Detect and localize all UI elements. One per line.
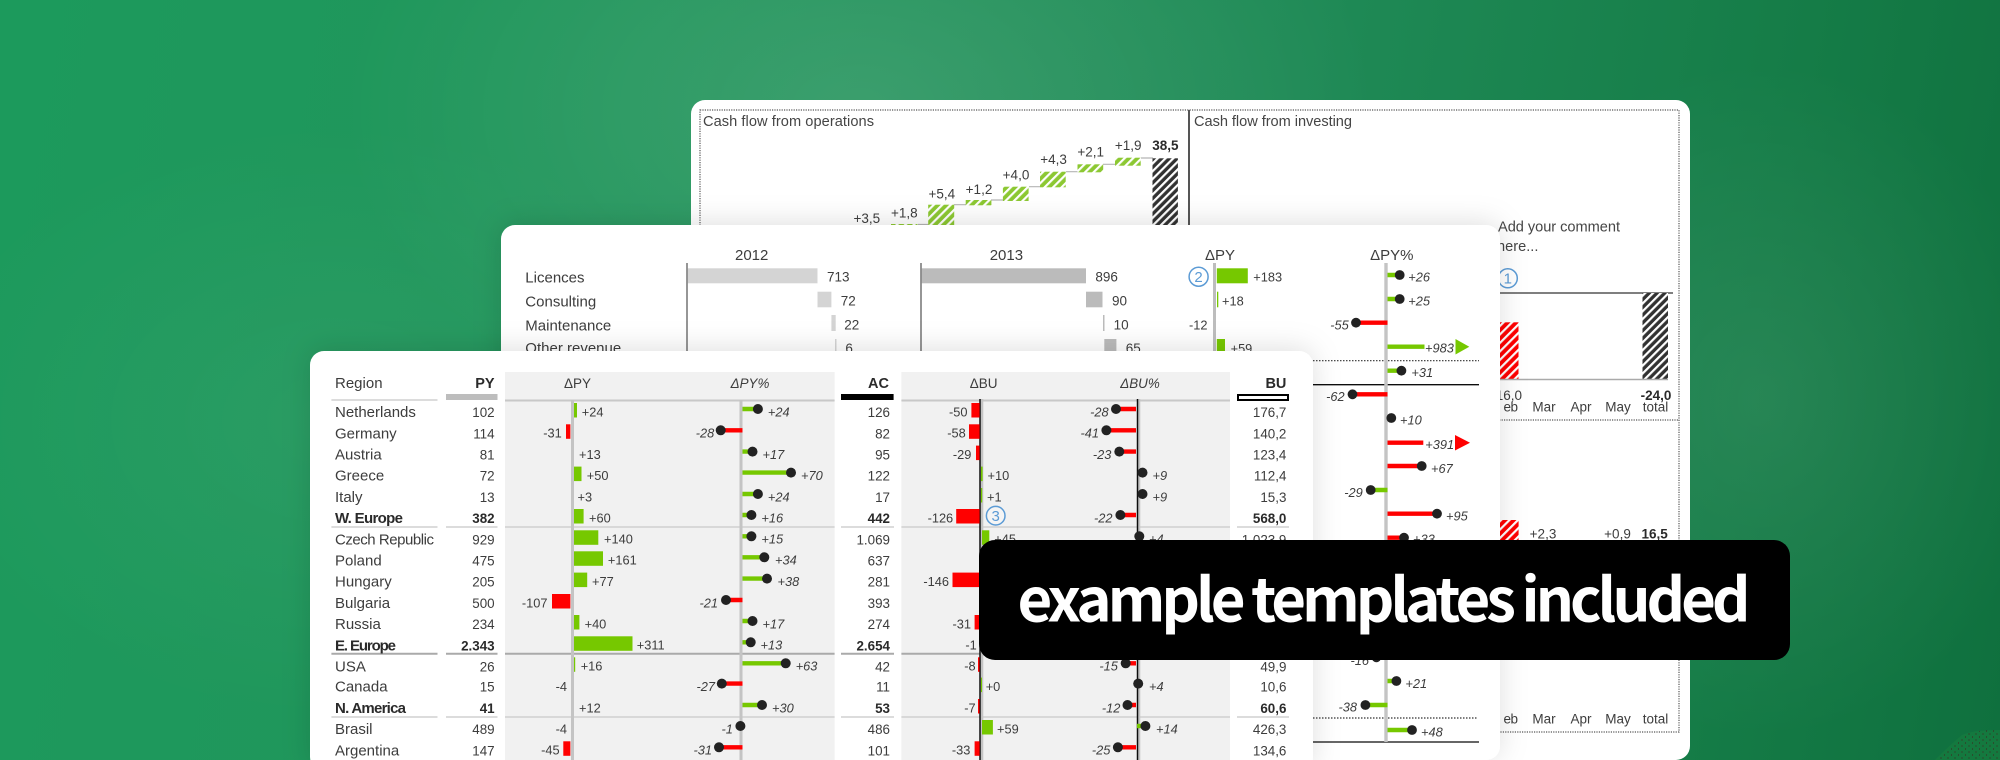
delta BU percent lollipop column: -22 xyxy=(1094,510,1112,525)
AC column: 126 xyxy=(868,405,890,420)
PY column: 475 xyxy=(472,553,495,568)
financing bar chart: Apr xyxy=(1570,711,1592,726)
PY column xyxy=(446,376,498,758)
callout marker 2 xyxy=(1189,267,1208,286)
delta BU percent lollipop column: +4 xyxy=(1149,532,1164,547)
panel: regional table (front card) xyxy=(310,351,1313,760)
banner text: example templates included xyxy=(1018,553,1750,640)
AC column: 486 xyxy=(868,722,890,737)
delta PY bar column xyxy=(522,376,665,760)
waterfall chart: +1,9 xyxy=(1115,138,1142,153)
BU column: 10,6 xyxy=(1260,680,1286,695)
delta PY percent lollipop column: -21 xyxy=(700,595,718,610)
delta PY percent lollipop chart: -55 xyxy=(1330,318,1350,333)
panel: cash flow dashboard (back card) xyxy=(691,100,1690,760)
waterfall chart: +4,3 xyxy=(1040,152,1067,167)
AC column: 1.069 xyxy=(856,532,890,547)
delta PY percent lollipop column: +63 xyxy=(796,659,817,674)
delta BU bar column: +0 xyxy=(986,679,1000,694)
delta PY bar chart: ΔPY xyxy=(1205,247,1235,264)
delta PY percent lollipop chart: +95 xyxy=(1446,508,1469,524)
AC column: 442 xyxy=(868,511,890,526)
delta PY percent lollipop chart: +31 xyxy=(1411,365,1433,380)
delta PY bar column: -107 xyxy=(522,595,548,610)
delta PY percent lollipop column: +17 xyxy=(762,616,785,631)
investing bar chart: Feb xyxy=(1490,400,1518,415)
bar chart 2012: 72 xyxy=(841,294,856,309)
delta PY bar column: -4 xyxy=(556,679,567,694)
delta BU percent lollipop column: +9 xyxy=(1152,489,1167,504)
delta PY bar chart xyxy=(1189,247,1282,356)
delta BU bar column: -1 xyxy=(965,638,977,653)
AC column: 17 xyxy=(875,490,890,505)
heading: cash flow from investing: Cash flow from investing xyxy=(1194,114,1352,130)
delta BU percent lollipop column: -28 xyxy=(1090,404,1109,419)
delta PY percent lollipop column: +34 xyxy=(775,553,797,568)
delta BU bar column: -146 xyxy=(923,574,949,589)
delta PY percent lollipop chart: -16 xyxy=(1350,653,1370,668)
delta PY percent lollipop chart: ΔPY% xyxy=(1370,247,1413,264)
region column: Hungary xyxy=(335,574,392,591)
AC column: 393 xyxy=(868,596,890,611)
AC column: 637 xyxy=(868,553,890,568)
AC column: 53 xyxy=(875,701,890,716)
delta BU percent lollipop column xyxy=(1080,376,1178,760)
PY column: 147 xyxy=(472,743,495,758)
PY column: 81 xyxy=(480,448,495,463)
region column: Austria xyxy=(335,447,382,464)
delta PY bar column: +16 xyxy=(581,659,602,674)
delta PY percent lollipop column: -28 xyxy=(696,426,715,441)
delta BU percent lollipop column: +9 xyxy=(1152,468,1167,483)
delta BU bar column xyxy=(923,376,1019,760)
bar chart 2013 xyxy=(921,247,1141,356)
BU column: BU xyxy=(1265,376,1286,392)
BU column: 1.023,9 xyxy=(1242,532,1286,547)
delta PY percent lollipop column: +70 xyxy=(801,468,824,483)
region column: Poland xyxy=(335,552,382,569)
delta PY bar chart: +59 xyxy=(1231,341,1252,356)
bar chart 2012: 713 xyxy=(827,270,850,285)
AC column: 11 xyxy=(876,680,890,695)
delta BU percent lollipop column: -25 xyxy=(1092,743,1111,758)
AC column: 95 xyxy=(875,448,890,463)
BU column: 426,3 xyxy=(1253,722,1286,737)
grey column backgrounds xyxy=(505,372,1230,760)
delta PY bar column: ΔPY xyxy=(564,376,591,391)
waterfall chart: 38,5 xyxy=(1152,138,1179,153)
delta BU bar column: -33 xyxy=(952,743,970,758)
callout marker 1: 1 xyxy=(1504,270,1512,288)
PY column: 929 xyxy=(472,532,495,547)
PY column: PY xyxy=(475,376,495,392)
region column: E. Europe xyxy=(335,637,396,654)
delta BU percent lollipop column: -15 xyxy=(1099,659,1119,674)
AC column: 101 xyxy=(868,743,890,758)
delta PY percent lollipop column: ΔPY% xyxy=(730,376,769,391)
delta PY percent lollipop chart: +25 xyxy=(1408,294,1431,309)
delta BU percent lollipop column: +4 xyxy=(1149,679,1164,694)
BU column: 15,3 xyxy=(1260,490,1286,505)
delta PY percent lollipop chart: +33 xyxy=(1413,532,1435,546)
region column: N. America xyxy=(335,700,407,717)
delta PY percent lollipop column xyxy=(694,376,824,760)
delta PY percent lollipop chart: +21 xyxy=(1405,676,1427,691)
investing bar chart: Apr xyxy=(1570,400,1592,415)
region column: Italy xyxy=(335,489,363,506)
callout marker 2: 2 xyxy=(1194,269,1203,286)
callout banner xyxy=(979,540,1790,660)
delta PY percent lollipop chart: +983 xyxy=(1425,341,1454,356)
row labels: Other revenue xyxy=(525,340,621,357)
region column: Canada xyxy=(335,679,388,696)
delta PY bar column: -45 xyxy=(541,743,560,758)
waterfall chart: +1,8 xyxy=(891,205,918,220)
PY column: 234 xyxy=(472,617,495,632)
delta BU bar column: ΔBU xyxy=(970,376,997,391)
delta PY bar column: +311 xyxy=(637,638,665,653)
delta PY percent lollipop column: +24 xyxy=(768,489,790,504)
delta BU bar column: -29 xyxy=(953,447,971,462)
decorative dotted corner xyxy=(1935,730,2000,760)
region column: Germany xyxy=(335,425,397,442)
delta BU percent lollipop column: +14 xyxy=(1156,721,1178,736)
bar chart 2012 xyxy=(687,247,859,356)
delta PY percent lollipop chart: +48 xyxy=(1421,724,1444,740)
delta BU bar column: -7 xyxy=(964,700,976,715)
waterfall chart: +2,1 xyxy=(1077,145,1104,160)
investing bar chart xyxy=(1490,293,1673,415)
delta PY percent lollipop chart: +391 xyxy=(1425,437,1454,452)
region column: Greece xyxy=(335,468,384,485)
AC column: 122 xyxy=(868,469,890,484)
waterfall chart: +1,2 xyxy=(966,182,992,197)
delta BU bar column: +45 xyxy=(994,532,1016,547)
financing bar chart: May xyxy=(1605,711,1631,726)
bar chart 2012: 2012 xyxy=(735,247,768,264)
delta PY bar column: +161 xyxy=(608,553,637,568)
investing bar chart: May xyxy=(1605,400,1631,415)
financing bar chart: Feb xyxy=(1490,711,1518,726)
delta PY percent lollipop column: +38 xyxy=(778,574,800,589)
dotted frame xyxy=(700,110,1679,732)
financing bar chart: 16,5 xyxy=(1641,526,1668,541)
region column: Czech Republic xyxy=(335,531,434,548)
delta PY bar column: +3 xyxy=(578,489,592,504)
delta BU bar column: +10 xyxy=(988,468,1009,483)
region column: Region xyxy=(335,375,383,392)
region column: Argentina xyxy=(335,742,400,759)
delta PY percent lollipop column: -31 xyxy=(694,743,712,758)
delta BU bar column: -8 xyxy=(964,659,976,674)
delta PY percent lollipop column: -1 xyxy=(722,721,733,736)
delta PY bar chart: +18 xyxy=(1222,294,1244,309)
AC column: 274 xyxy=(868,617,891,632)
financing bar chart xyxy=(1490,520,1668,726)
bar chart 2013: 65 xyxy=(1126,341,1141,356)
table separators xyxy=(331,400,1289,717)
BU column xyxy=(1238,376,1288,758)
row labels: Maintenance xyxy=(525,318,611,335)
BU column: 123,4 xyxy=(1253,448,1287,463)
AC column xyxy=(841,376,894,758)
BU column: 176,7 xyxy=(1253,405,1286,420)
BU column: 568,0 xyxy=(1253,511,1286,526)
delta PY percent lollipop chart: +67 xyxy=(1431,461,1454,476)
financing bar chart: Mar xyxy=(1532,711,1556,726)
PY column: 72 xyxy=(480,469,495,484)
AC column: 42 xyxy=(875,659,890,674)
AC column: 2.654 xyxy=(856,638,891,653)
PY column: 114 xyxy=(473,426,495,441)
comment text: here... xyxy=(1497,239,1538,255)
waterfall chart: +4,0 xyxy=(1003,167,1029,182)
bar chart 2013: 10 xyxy=(1114,318,1129,333)
bar chart 2013: 896 xyxy=(1095,270,1118,285)
delta PY percent lollipop column: -27 xyxy=(696,679,716,694)
delta PY bar column: +50 xyxy=(587,468,609,483)
delta PY bar chart: +183 xyxy=(1253,270,1282,285)
delta PY percent lollipop chart xyxy=(1313,247,1479,742)
financing bar chart: +2,3 xyxy=(1530,526,1556,541)
delta BU bar column: +59 xyxy=(997,721,1019,736)
comment text: Add your comment xyxy=(1498,220,1620,236)
delta PY percent lollipop column: +13 xyxy=(760,638,782,653)
region column: Bulgaria xyxy=(335,595,391,612)
waterfall chart: +3,5 xyxy=(853,211,880,226)
PY column: 26 xyxy=(480,659,495,674)
region column: Russia xyxy=(335,616,382,633)
delta PY percent lollipop chart: +10 xyxy=(1400,413,1423,428)
callout marker 1 xyxy=(1498,269,1517,288)
financing bar chart: +0,9 xyxy=(1604,526,1631,541)
row labels: Licences xyxy=(525,270,585,287)
region column: W. Europe xyxy=(335,510,403,527)
delta PY bar column: +140 xyxy=(604,532,633,547)
delta BU bar column: -126 xyxy=(928,510,953,525)
investing bar chart: Mar xyxy=(1532,400,1556,415)
delta PY bar column: +40 xyxy=(585,616,606,631)
delta PY bar column: +24 xyxy=(582,404,604,419)
delta PY bar chart: -12 xyxy=(1189,318,1208,333)
delta BU percent lollipop column: -12 xyxy=(1102,700,1120,715)
BU column: 134,6 xyxy=(1253,743,1286,758)
bar chart 2013: 90 xyxy=(1112,294,1127,309)
delta PY bar column: +60 xyxy=(589,510,611,525)
delta BU bar column: +1 xyxy=(987,489,1002,504)
region column: Netherlands xyxy=(335,404,416,421)
BU column: 112,4 xyxy=(1254,469,1287,484)
delta PY percent lollipop chart: -29 xyxy=(1344,485,1363,500)
region column xyxy=(335,375,434,759)
PY column: 102 xyxy=(472,405,495,420)
PY column: 15 xyxy=(480,680,495,695)
PY column: 41 xyxy=(480,701,495,716)
investing bar chart: -24,0 xyxy=(1641,388,1671,403)
delta PY percent lollipop column: +24 xyxy=(768,404,790,419)
delta PY bar column: -31 xyxy=(543,426,562,441)
delta PY bar column: -4 xyxy=(556,721,567,736)
delta BU percent lollipop column: ΔBU% xyxy=(1119,376,1160,391)
waterfall chart: +5,4 xyxy=(928,186,956,201)
delta PY percent lollipop chart: -38 xyxy=(1338,700,1358,715)
waterfall chart xyxy=(853,138,1179,238)
PY column: 489 xyxy=(472,722,495,737)
AC column: AC xyxy=(868,376,890,392)
PY column: 2.343 xyxy=(461,638,495,653)
callout marker 3: 3 xyxy=(992,508,1000,525)
bar chart 2013: 2013 xyxy=(990,247,1023,264)
delta PY percent lollipop column: +16 xyxy=(761,510,784,525)
delta PY percent lollipop column: +17 xyxy=(762,447,785,462)
delta BU bar column: -50 xyxy=(949,404,968,419)
region column: Brasil xyxy=(335,721,373,738)
callout marker 3 xyxy=(986,506,1005,525)
comment text xyxy=(1497,220,1620,255)
financing bar chart: total xyxy=(1643,711,1668,726)
panel: revenue comparison (middle card) xyxy=(501,225,1500,760)
BU column: 60,6 xyxy=(1260,701,1286,716)
delta PY bar column: +13 xyxy=(579,447,601,462)
AC column: 82 xyxy=(875,426,890,441)
heading: cash flow from operations: Cash flow from operations xyxy=(703,114,874,130)
delta BU percent lollipop column: -41 xyxy=(1080,426,1099,441)
PY column: 500 xyxy=(472,596,495,611)
AC column: 281 xyxy=(868,575,890,590)
delta PY percent lollipop column: +15 xyxy=(761,532,784,547)
PY column: 382 xyxy=(472,511,495,526)
delta BU bar column: -31 xyxy=(952,616,971,631)
investing bar chart: -16,0 xyxy=(1491,388,1522,403)
row labels: Consulting xyxy=(525,294,596,311)
investing bar chart: total xyxy=(1643,400,1668,415)
bar chart 2012: 6 xyxy=(845,341,853,356)
delta PY bar column: +12 xyxy=(579,700,601,715)
region column: USA xyxy=(335,658,366,675)
BU column: 49,9 xyxy=(1260,659,1286,674)
delta BU percent lollipop column: -23 xyxy=(1093,447,1111,462)
delta PY percent lollipop column: +30 xyxy=(772,700,795,715)
delta PY percent lollipop chart: -62 xyxy=(1326,389,1345,404)
BU column: 140,2 xyxy=(1253,426,1286,441)
bar chart 2012: 22 xyxy=(844,318,859,333)
PY column: 205 xyxy=(472,575,495,590)
PY column: 13 xyxy=(480,490,495,505)
delta PY percent lollipop chart: +26 xyxy=(1408,270,1431,285)
delta PY bar column: +77 xyxy=(592,574,614,589)
row labels xyxy=(525,270,621,357)
delta BU bar column: -58 xyxy=(947,426,966,441)
